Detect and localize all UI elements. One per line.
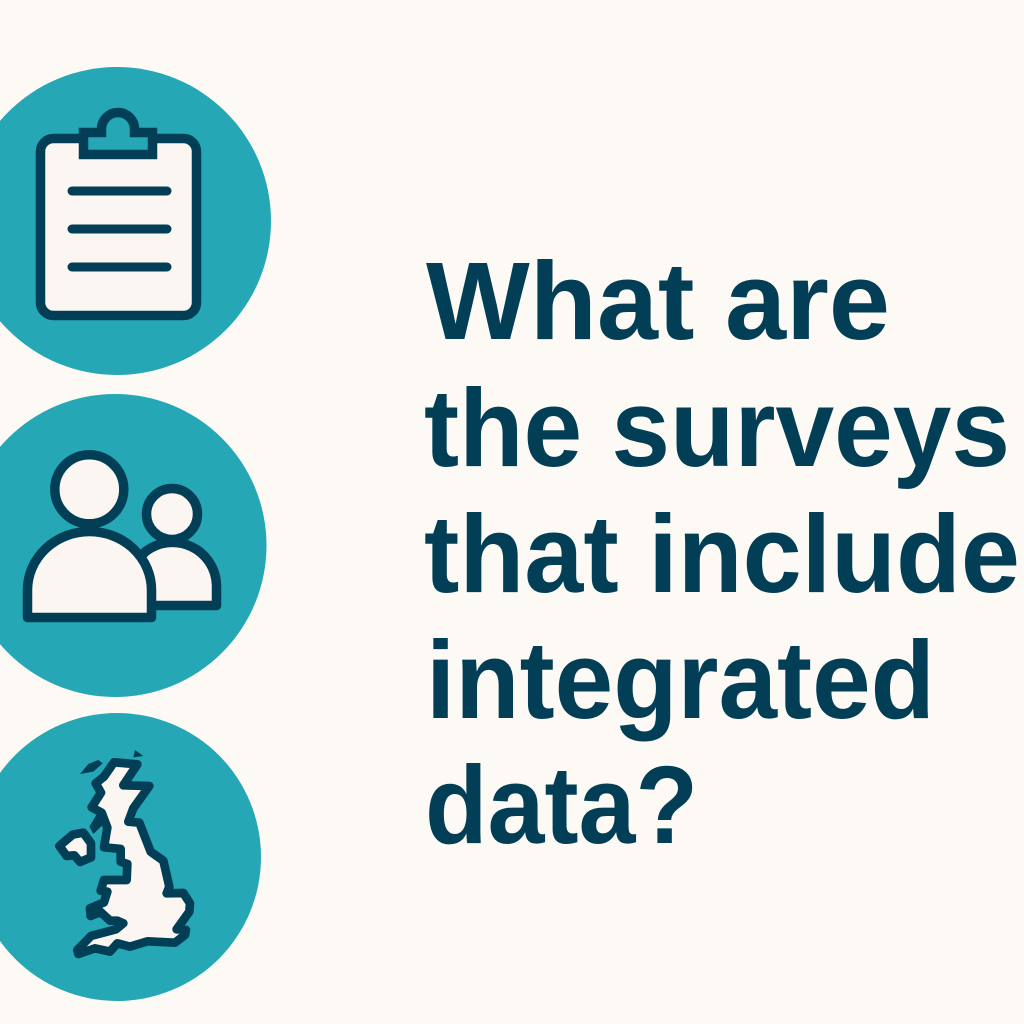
title: the surveys xyxy=(424,367,1010,490)
Ireland xyxy=(59,833,91,862)
Northern Ireland link xyxy=(89,812,103,834)
icon: two people in teal circle xyxy=(0,394,266,697)
icon: clipboard in teal circle xyxy=(0,67,271,375)
Great Britain xyxy=(77,762,190,954)
title: data? xyxy=(425,744,698,867)
Shetland xyxy=(133,750,143,757)
title: that include xyxy=(424,493,1020,616)
icon: UK map in teal circle xyxy=(0,713,261,1001)
title xyxy=(424,240,1020,867)
title: integrated xyxy=(426,619,935,742)
Hebrides xyxy=(80,760,103,774)
title: What are xyxy=(426,240,890,363)
